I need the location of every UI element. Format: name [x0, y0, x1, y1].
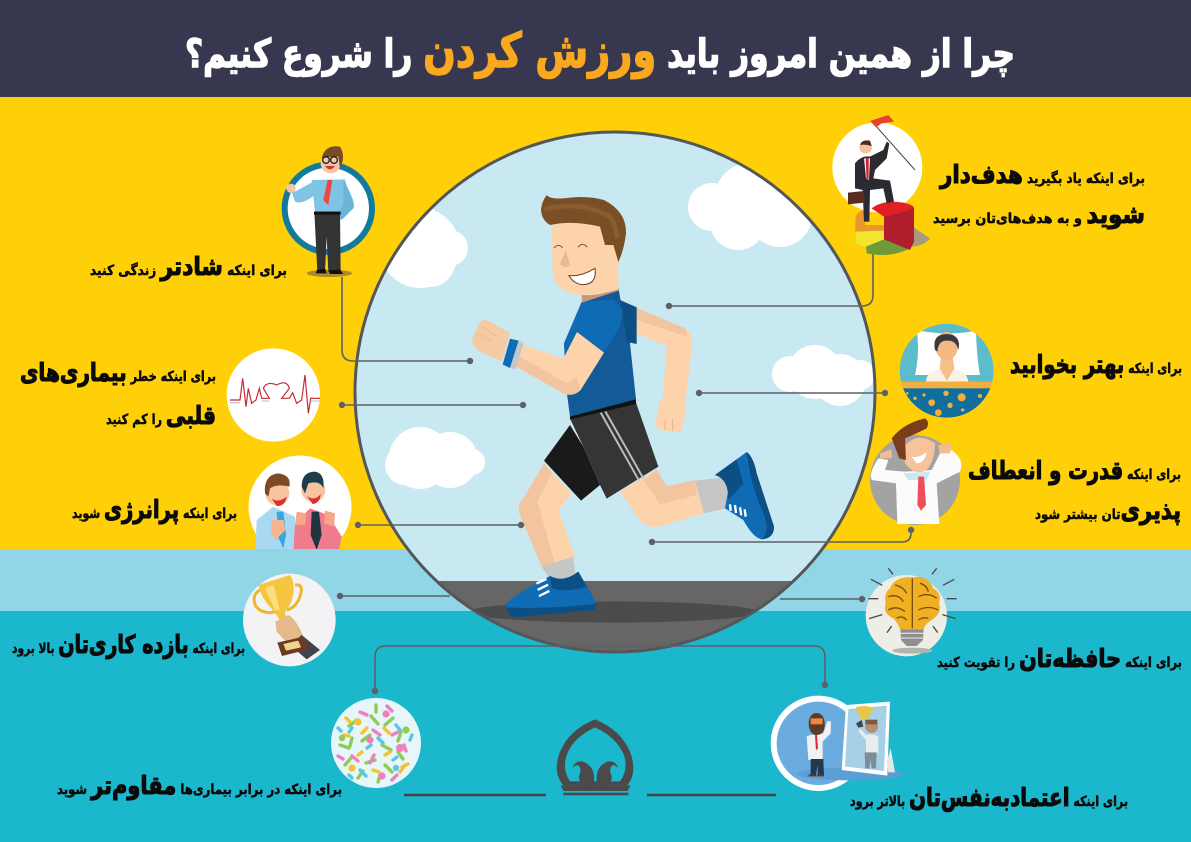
text: heart disease line 2: قلبی را کم کنید — [106, 401, 216, 430]
title: چرا از همین امروز باید ورزش کردن را شروع کنیم؟ — [185, 23, 1015, 79]
logo lines — [404, 794, 776, 796]
icon: bacteria dish — [331, 698, 421, 788]
icon: mirror confidence — [774, 699, 903, 788]
back arm — [636, 307, 692, 432]
shorts — [544, 399, 658, 501]
man — [807, 713, 831, 776]
icon: sleep — [898, 324, 995, 418]
text: self confidence: برای اینکه اعتماد‌به‌نفس‌تان بالاتر برود — [850, 783, 1128, 812]
connector lines — [340, 253, 911, 691]
reflection — [856, 706, 878, 768]
icon: energetic friends — [248, 456, 352, 558]
logo — [404, 719, 776, 795]
icon: happy man — [285, 146, 372, 277]
icon: flexible man — [870, 418, 961, 525]
clouds and ground — [385, 164, 874, 650]
text: strength line 2: پذیری‌تان بیشتر شود — [1035, 496, 1181, 526]
torso — [564, 289, 637, 417]
icon: heartbeat — [227, 348, 320, 442]
text: energetic: برای اینکه پرانرژی شوید — [72, 495, 237, 525]
icon: trophy — [243, 574, 336, 666]
icon: goal man — [832, 115, 930, 255]
text: disease resistance: برای اینکه در برابر بیماری‌ها مقاوم‌تر شوید — [57, 771, 342, 801]
text: memory: برای اینکه حافظه‌تان را تقویت کنید — [937, 644, 1182, 673]
text: heart disease line 1: برای اینکه خطر بیماری‌های — [20, 358, 216, 387]
title banner — [0, 0, 1191, 97]
front arm and hand — [472, 320, 604, 395]
text: strength line 1: برای اینکه قدرت و انعطاف — [968, 456, 1181, 486]
central circle scene — [340, 132, 900, 661]
head — [541, 195, 626, 303]
runner — [472, 195, 774, 617]
back leg — [620, 452, 774, 539]
text: happier life: برای اینکه شادتر زندگی کنید — [90, 252, 287, 282]
icon: brain bulb — [866, 568, 957, 656]
text: goals line 1: برای اینکه یاد بگیرید هدف‌دار — [938, 160, 1145, 189]
connector dots — [337, 303, 914, 694]
front leg — [506, 463, 595, 617]
text: work output: برای اینکه بازده کاری‌تان بالا برود — [12, 630, 245, 659]
text: goals line 2: شوید و به هدف‌های‌تان برسید — [933, 200, 1145, 230]
